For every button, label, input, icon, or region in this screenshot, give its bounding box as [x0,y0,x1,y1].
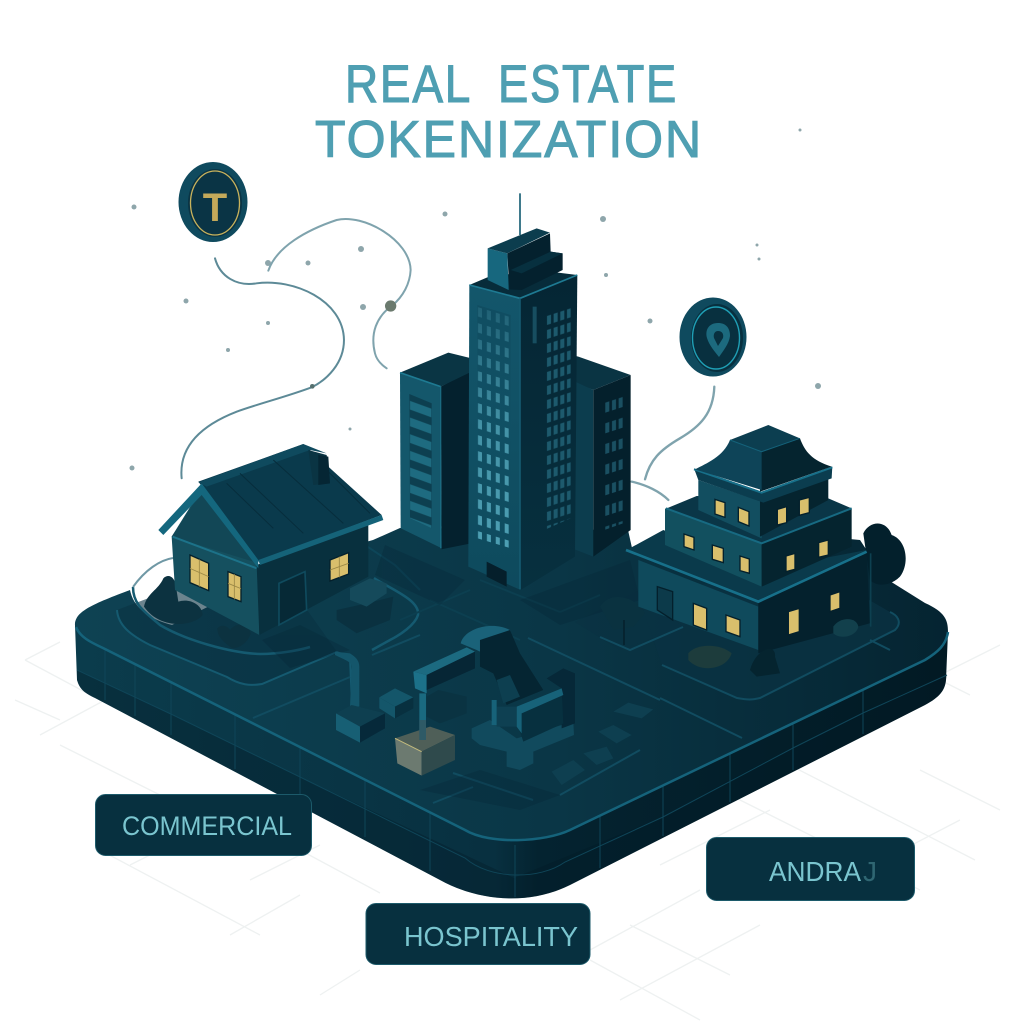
construction machinery [335,626,653,785]
label: commercial [96,794,312,856]
label: andra [706,838,914,900]
coin: T token: T [203,186,227,230]
hotel building [600,425,906,677]
label: hospitality: HOSPITALITY [404,921,578,952]
coin: location pin [680,298,746,376]
house: residential [144,444,393,648]
platform base [75,525,948,898]
label: hospitality [366,904,590,964]
label: andra: ANDRA [769,856,861,887]
ground shadows [262,545,640,810]
particles [130,128,821,470]
floor grid [15,642,1000,1020]
central tower [468,193,577,590]
left office building [400,353,472,549]
title: TOKENIZATION [315,111,703,169]
label: andra: J [863,856,877,887]
title: REAL [345,55,472,114]
label: commercial: COMMERCIAL [122,811,292,841]
title [315,55,703,169]
curves: token path right [632,387,714,500]
right office building [572,355,631,557]
coin: T token [178,162,248,242]
curves: token paths left [181,219,411,478]
title: ESTATE [498,55,678,114]
ground pads [117,560,899,700]
road network [117,545,899,803]
